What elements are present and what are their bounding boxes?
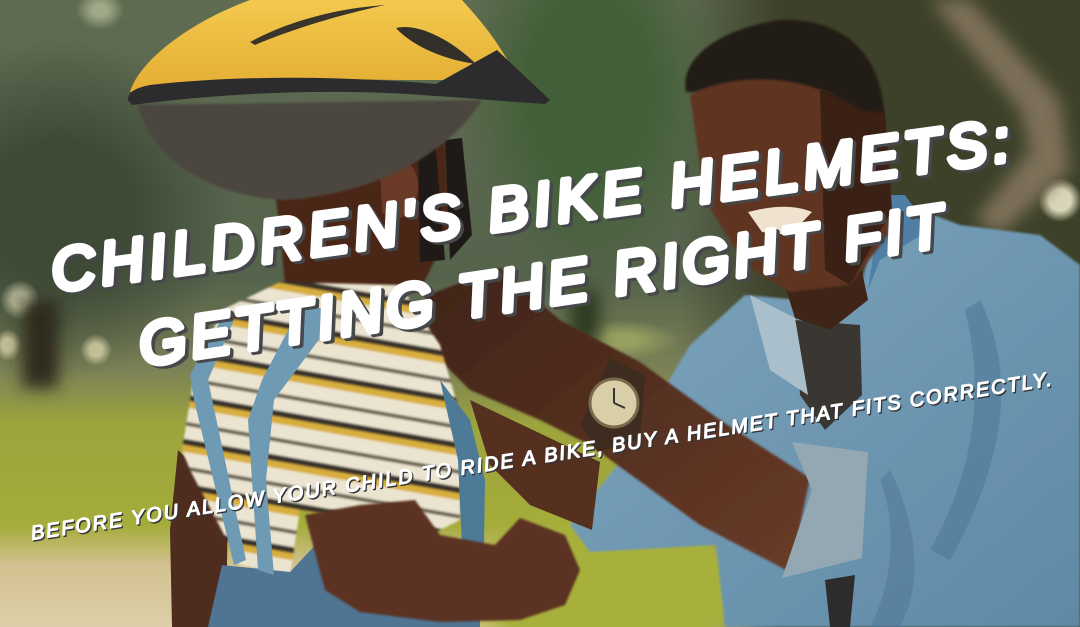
shirt cuff [782,442,868,578]
helmet yellow shell [130,0,520,92]
near forearm and hand [425,268,810,572]
tagline [29,369,1054,546]
title line 2: GETTING THE RIGHT FIT [135,192,952,378]
far forearm [470,400,600,530]
overall strap left [190,318,246,565]
child's far arm [170,450,228,627]
child's ear [380,160,418,219]
title line 1 shadow: CHILDREN'S BIKE HELMETS: [50,109,1017,307]
tagline text: BEFORE YOU ALLOW YOUR CHILD TO RIDE A BIKE, BUY A HELMET THAT FITS CORRECTLY. [29,369,1053,545]
child [170,130,580,627]
tagline shadow: BEFORE YOU ALLOW YOUR CHILD TO RIDE A BIKE, BUY A HELMET THAT FITS CORRECTLY. [31,370,1054,546]
watch [580,358,645,452]
child's near arm and hand [305,500,580,622]
man's hair [685,20,884,112]
denim overalls bottom [208,540,480,627]
man's neck [780,262,868,330]
child's neck and head [272,130,450,290]
helmet [128,0,550,200]
overall strap middle [248,298,335,575]
man's dark t-shirt [795,320,862,430]
helmet vent [396,27,476,64]
blurred tree trunks [22,0,1070,388]
man [425,20,1080,627]
overall strap right [440,380,485,548]
man's denim shirt [570,195,1080,627]
helmet rim [128,50,550,105]
title line 1: CHILDREN'S BIKE HELMETS: [47,107,1013,304]
title [47,106,1017,307]
helmet underside [138,100,482,200]
child's striped shirt [182,282,462,575]
man's smile [748,207,812,235]
helmet strap [418,138,472,262]
title second line [135,191,955,381]
man's head [690,76,892,292]
title line 2 shadow: GETTING THE RIGHT FIT [138,194,955,381]
